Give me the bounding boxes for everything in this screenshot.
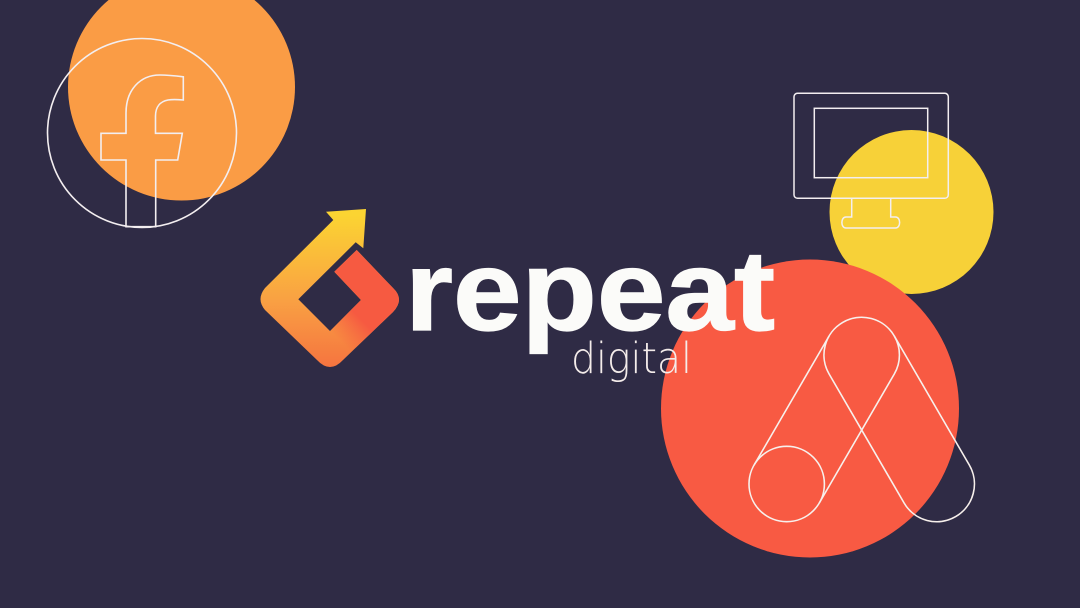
wordmark: repeat: repeat [405,228,775,355]
wordmark: digital: digital [571,334,692,384]
logo [260,209,775,384]
red circle [661,260,959,558]
icon: monitor outline [794,93,948,228]
yellow circle [830,130,994,294]
icon: google ads outline [749,317,974,522]
orange circle [68,0,295,200]
icon: facebook outline [48,38,236,228]
logo mark: arrow diamond [260,209,399,367]
